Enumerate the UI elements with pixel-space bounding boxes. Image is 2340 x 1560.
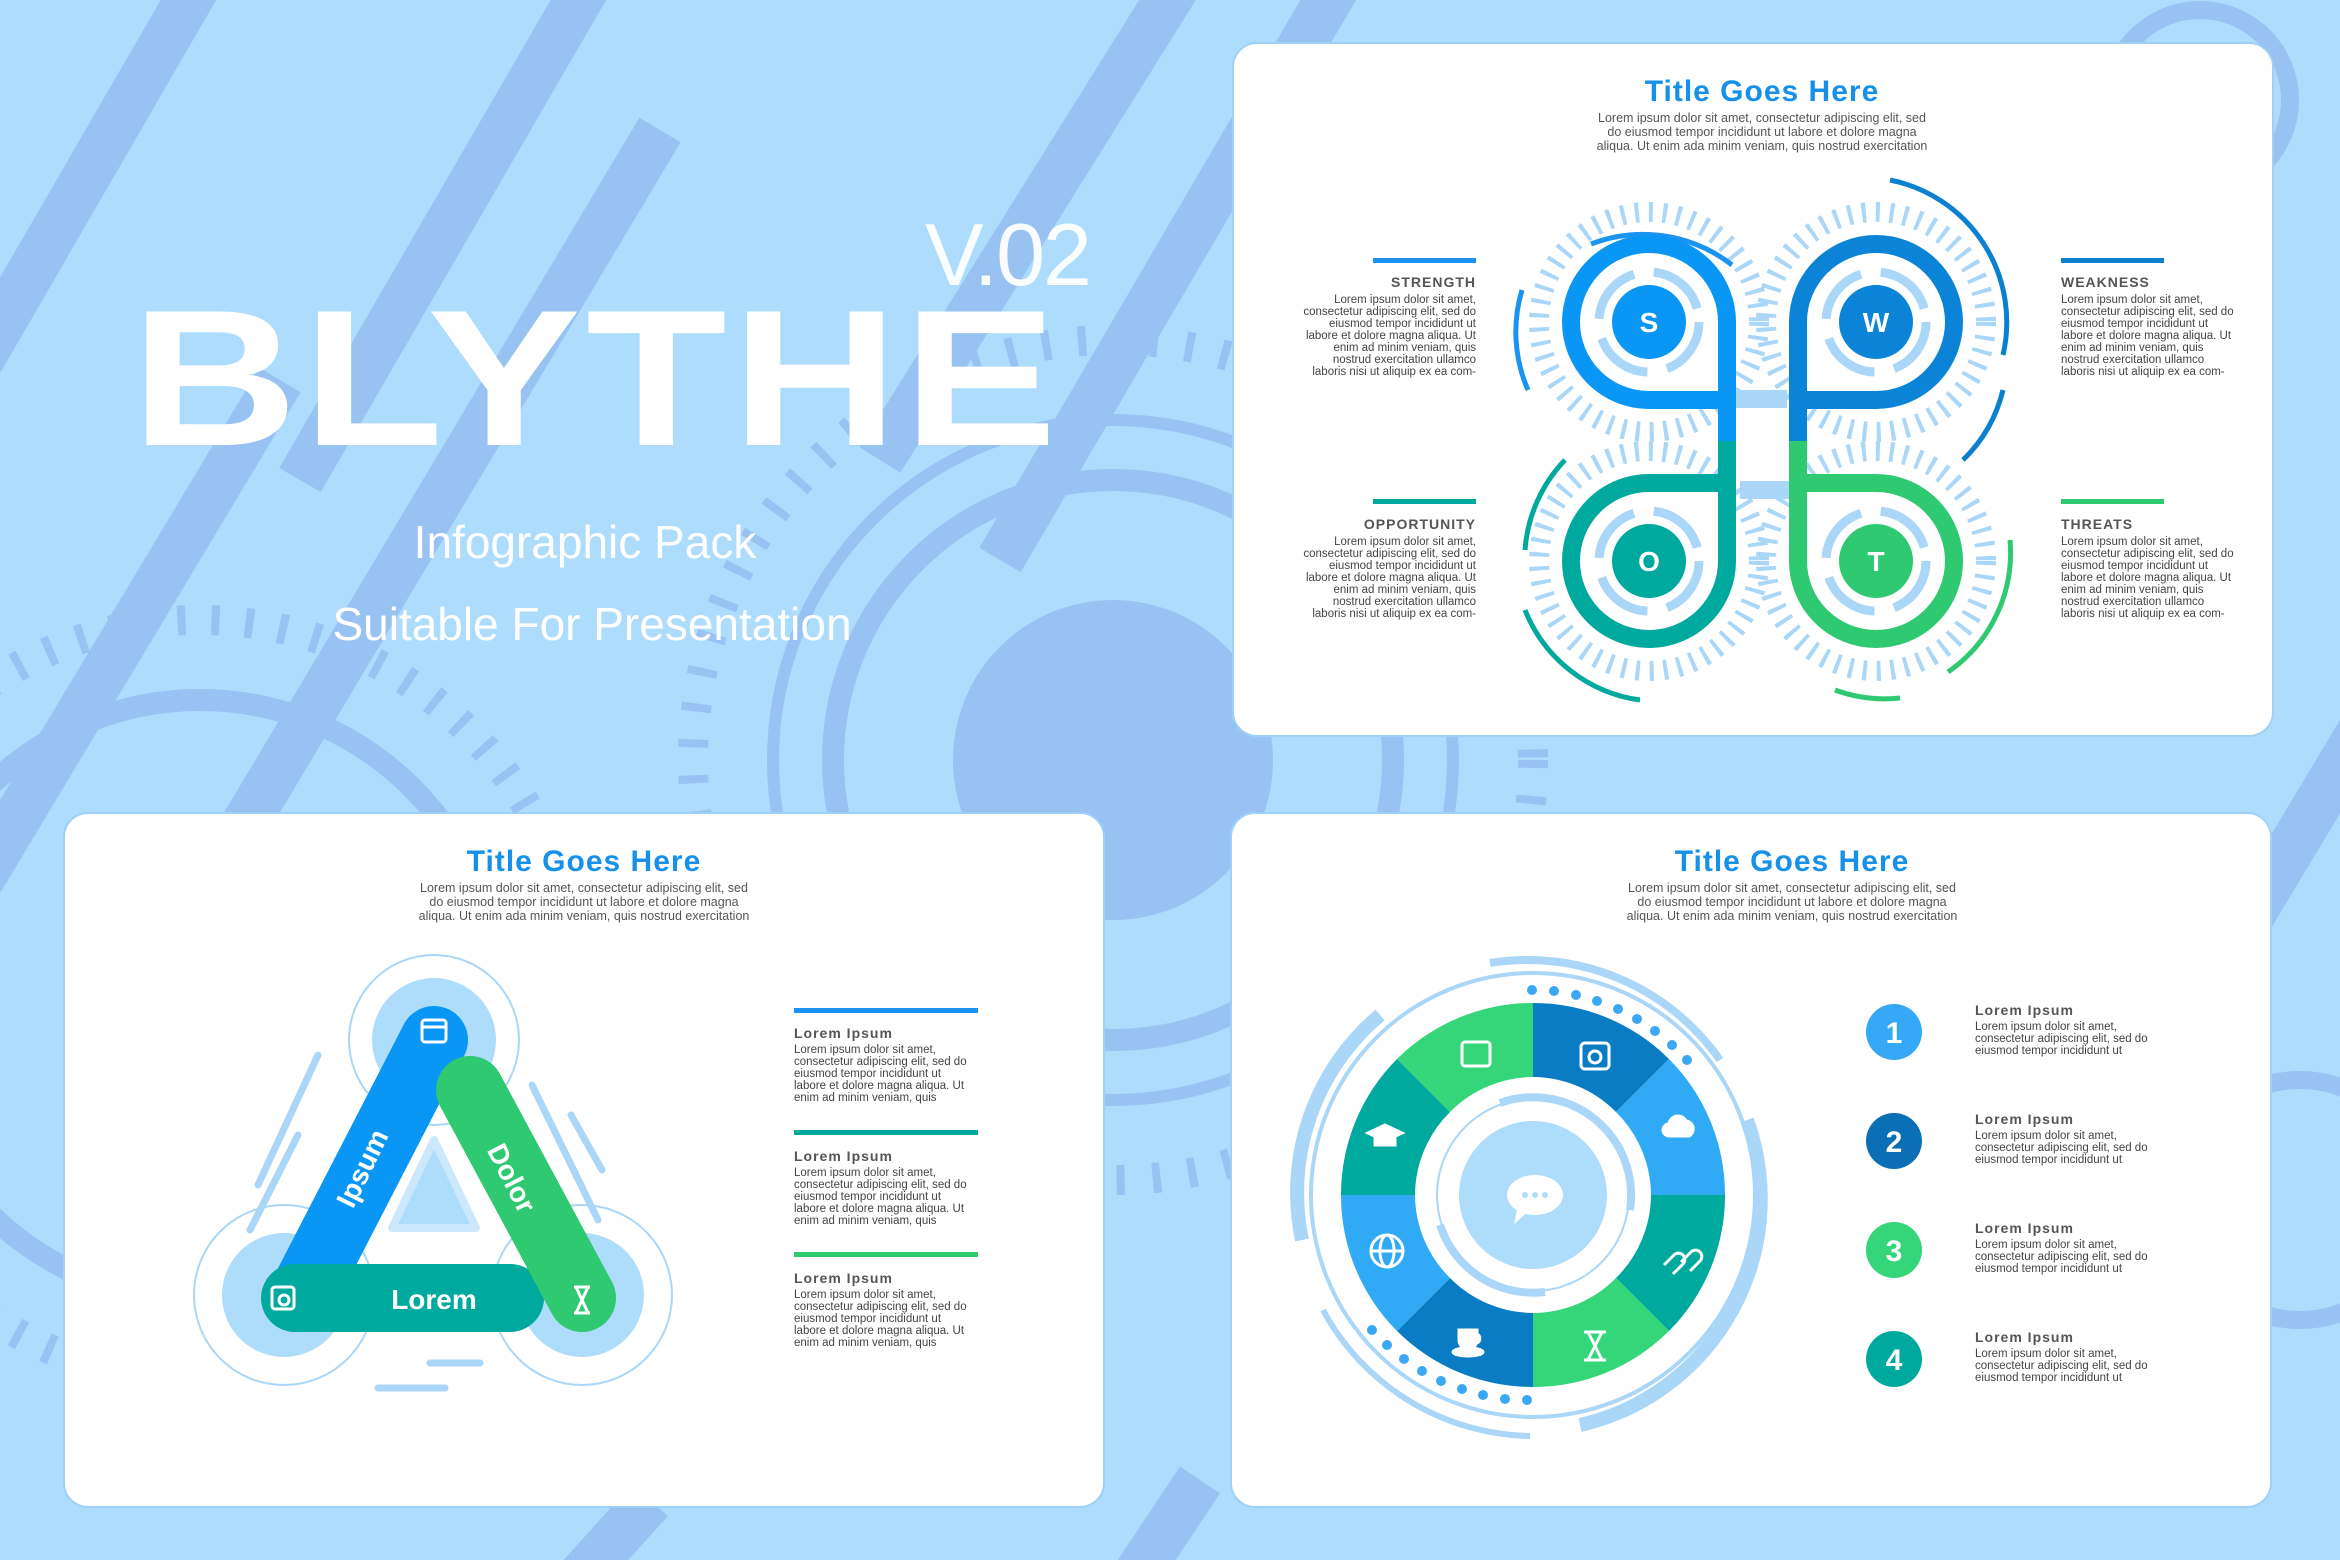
SWOT circles — [1612, 285, 1913, 598]
number list: Lorem Ipsum — [1975, 1111, 2074, 1127]
heading: Title Goes Here — [1645, 75, 1879, 108]
tick rings — [1539, 212, 1986, 671]
SWOT circles: S — [1640, 307, 1658, 338]
threats text: consectetur adipiscing elit, sed do — [2061, 548, 2234, 560]
number list: Lorem ipsum dolor sit amet, — [1975, 1021, 2117, 1033]
band labels — [330, 1124, 542, 1315]
description: aliqua. Ut enim ada minim veniam, quis nostrud exercitation — [1627, 909, 1957, 923]
wheel segments — [1341, 1003, 1725, 1387]
list: consectetur adipiscing elit, sed do — [794, 1301, 967, 1313]
opportunity text: laboris nisi ut aliquip ex ea com- — [1312, 608, 1476, 620]
number list — [1866, 1002, 2148, 1387]
strength text: nostrud exercitation ullamco — [1333, 354, 1476, 366]
subtitle: Infographic Pack — [414, 516, 757, 568]
weakness text: enim ad minim veniam, quis — [2061, 342, 2204, 354]
SWOT circles: W — [1863, 307, 1890, 338]
list: eiusmod tempor incididunt ut — [794, 1313, 942, 1325]
opportunity text: enim ad minim veniam, quis — [1333, 584, 1476, 596]
icons — [272, 1020, 590, 1313]
panel: triangle — [64, 813, 1104, 1507]
strength text: Lorem ipsum dolor sit amet, — [1334, 294, 1476, 306]
threats text — [2061, 499, 2234, 620]
description: aliqua. Ut enim ada minim veniam, quis nostrud exercitation — [1597, 139, 1927, 153]
title: BLYTHE: BLYTHE — [131, 270, 1062, 487]
number list: consectetur adipiscing elit, sed do — [1975, 1033, 2148, 1045]
connectors — [1734, 390, 1787, 408]
number list: eiusmod tempor incididunt ut — [1975, 1263, 2123, 1275]
strength text — [1303, 258, 1477, 378]
bands — [295, 1040, 582, 1298]
number list: eiusmod tempor incididunt ut — [1975, 1372, 2123, 1384]
weakness text — [2061, 258, 2234, 378]
loops — [1571, 244, 1954, 639]
threats text: nostrud exercitation ullamco — [2061, 596, 2204, 608]
weakness text: WEAKNESS — [2061, 274, 2150, 290]
number list: 1 — [1886, 1017, 1902, 1050]
description: do eiusmod tempor incididunt ut labore et dolore magna — [1637, 895, 1947, 909]
list: eiusmod tempor incididunt ut — [794, 1068, 942, 1080]
number list: Lorem ipsum dolor sit amet, — [1975, 1130, 2117, 1142]
panel: SWOT — [1233, 43, 2273, 736]
description — [419, 881, 749, 923]
opportunity text: eiusmod tempor incididunt ut — [1329, 560, 1477, 572]
strength text: laboris nisi ut aliquip ex ea com- — [1312, 366, 1476, 378]
strength text: enim ad minim veniam, quis — [1333, 342, 1476, 354]
weakness text: eiusmod tempor incididunt ut — [2061, 318, 2209, 330]
list: Lorem ipsum dolor sit amet, — [794, 1289, 936, 1301]
list: Lorem Ipsum — [794, 1270, 893, 1286]
inner rings — [1437, 1097, 1631, 1293]
number list: consectetur adipiscing elit, sed do — [1975, 1360, 2148, 1372]
number list: Lorem Ipsum — [1975, 1220, 2074, 1236]
number list: Lorem ipsum dolor sit amet, — [1975, 1348, 2117, 1360]
description: aliqua. Ut enim ada minim veniam, quis nostrud exercitation — [419, 909, 749, 923]
outer rings — [1297, 960, 1761, 1436]
weakness text: nostrud exercitation ullamco — [2061, 354, 2204, 366]
threats text: eiusmod tempor incididunt ut — [2061, 560, 2209, 572]
description: Lorem ipsum dolor sit amet, consectetur adipiscing elit, sed — [1628, 881, 1956, 895]
description: do eiusmod tempor incididunt ut labore et dolore magna — [1607, 125, 1917, 139]
opportunity text: consectetur adipiscing elit, sed do — [1303, 548, 1476, 560]
number list: 3 — [1886, 1235, 1902, 1268]
icon: chat — [1507, 1175, 1563, 1224]
subtitle: Suitable For Presentation — [332, 598, 852, 650]
outer arcs — [1516, 180, 2011, 700]
list: enim ad minim veniam, quis — [794, 1337, 937, 1349]
opportunity text — [1303, 499, 1477, 620]
list: Lorem ipsum dolor sit amet, — [794, 1044, 936, 1056]
opportunity text: OPPORTUNITY — [1364, 516, 1476, 532]
weakness text: consectetur adipiscing elit, sed do — [2061, 306, 2234, 318]
number list: Lorem ipsum dolor sit amet, — [1975, 1239, 2117, 1251]
version label: V.02 — [925, 205, 1090, 304]
band labels: Ipsum — [330, 1124, 394, 1212]
list: Lorem Ipsum — [794, 1025, 893, 1041]
threats text: Lorem ipsum dolor sit amet, — [2061, 536, 2203, 548]
number list: Lorem Ipsum — [1975, 1329, 2074, 1345]
band labels: Dolor — [481, 1139, 542, 1218]
SWOT circles: T — [1867, 546, 1885, 577]
description — [1627, 881, 1957, 923]
opportunity text: nostrud exercitation ullamco — [1333, 596, 1476, 608]
list: consectetur adipiscing elit, sed do — [794, 1056, 967, 1068]
heading: Title Goes Here — [1675, 845, 1909, 878]
list: consectetur adipiscing elit, sed do — [794, 1179, 967, 1191]
opportunity text: labore et dolore magna aliqua. Ut — [1306, 572, 1477, 584]
halos — [194, 955, 672, 1388]
threats text: laboris nisi ut aliquip ex ea com- — [2061, 608, 2225, 620]
panel: wheel — [1231, 813, 2271, 1507]
description: Lorem ipsum dolor sit amet, consectetur adipiscing elit, sed — [420, 881, 748, 895]
heading: Title Goes Here — [467, 845, 701, 878]
threats text: enim ad minim veniam, quis — [2061, 584, 2204, 596]
number list: eiusmod tempor incididunt ut — [1975, 1154, 2123, 1166]
subtitle — [332, 516, 852, 650]
list: enim ad minim veniam, quis — [794, 1215, 937, 1227]
threats text: THREATS — [2061, 516, 2133, 532]
number list: consectetur adipiscing elit, sed do — [1975, 1142, 2148, 1154]
center — [1459, 1121, 1607, 1269]
description: Lorem ipsum dolor sit amet, consectetur adipiscing elit, sed — [1598, 111, 1926, 125]
opportunity text: Lorem ipsum dolor sit amet, — [1334, 536, 1476, 548]
threats text: labore et dolore magna aliqua. Ut — [2061, 572, 2232, 584]
strength text: consectetur adipiscing elit, sed do — [1303, 306, 1476, 318]
band labels: Lorem — [391, 1284, 477, 1315]
list: labore et dolore magna aliqua. Ut — [794, 1203, 965, 1215]
number list: eiusmod tempor incididunt ut — [1975, 1045, 2123, 1057]
weakness text: laboris nisi ut aliquip ex ea com- — [2061, 366, 2225, 378]
strength text: eiusmod tempor incididunt ut — [1329, 318, 1477, 330]
SWOT circles: O — [1638, 546, 1660, 577]
list: labore et dolore magna aliqua. Ut — [794, 1080, 965, 1092]
segment icons — [1368, 1042, 1702, 1360]
list: enim ad minim veniam, quis — [794, 1092, 937, 1104]
list: Lorem ipsum dolor sit amet, — [794, 1167, 936, 1179]
list: Lorem Ipsum — [794, 1148, 893, 1164]
strength text: STRENGTH — [1391, 274, 1476, 290]
description: do eiusmod tempor incididunt ut labore et dolore magna — [429, 895, 739, 909]
dots — [1367, 985, 1692, 1405]
list — [794, 1008, 978, 1349]
weakness text: Lorem ipsum dolor sit amet, — [2061, 294, 2203, 306]
list: labore et dolore magna aliqua. Ut — [794, 1325, 965, 1337]
number list: consectetur adipiscing elit, sed do — [1975, 1251, 2148, 1263]
number list: Lorem Ipsum — [1975, 1002, 2074, 1018]
weakness text: labore et dolore magna aliqua. Ut — [2061, 330, 2232, 342]
number list: 2 — [1886, 1126, 1902, 1159]
number list: 4 — [1886, 1344, 1903, 1377]
description — [1597, 111, 1927, 153]
strength text: labore et dolore magna aliqua. Ut — [1306, 330, 1477, 342]
list: eiusmod tempor incididunt ut — [794, 1191, 942, 1203]
